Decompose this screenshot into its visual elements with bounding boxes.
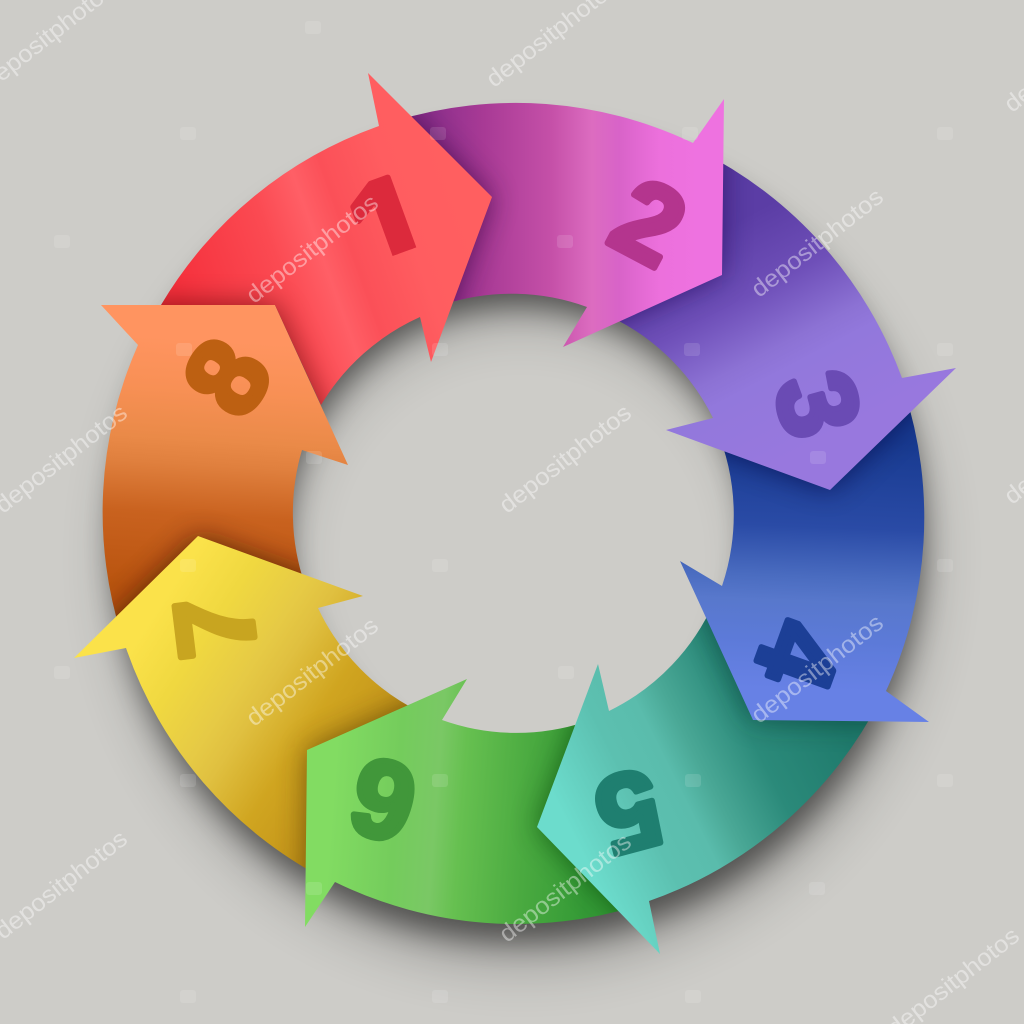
watermark text: depositphotos: [494, 399, 637, 519]
arrow 7: yellow: 7: [151, 589, 280, 665]
arrow 8: orange: [101, 305, 348, 616]
watermark text: depositphotos: [494, 828, 637, 948]
watermark text: depositphotos: [241, 612, 384, 732]
watermark text: depositphotos: [746, 183, 889, 303]
arrow 6: green: [305, 679, 618, 927]
arrow 8: orange: 8: [159, 319, 296, 436]
arrow 3: purple: [620, 164, 956, 490]
arrow 3: purple: 3: [750, 359, 885, 450]
watermark text: depositphotos: [746, 609, 889, 729]
arrow 4: blue: 4: [730, 605, 867, 705]
arrow 5: teal: 5: [583, 744, 674, 879]
arrow 1: red: [161, 73, 492, 405]
arrow 2: magenta: 2: [593, 154, 705, 291]
watermark text: depositphotos: [241, 189, 384, 309]
ring drop shadow: [113, 131, 923, 958]
arrow 4: blue: [680, 412, 929, 722]
arrow 1: red: 1: [328, 140, 455, 314]
arrow 2: magenta: [411, 99, 724, 347]
arrow 6: green: 6: [338, 732, 429, 867]
arrow 7: yellow: [74, 536, 408, 868]
arrow 5: teal: [537, 618, 868, 954]
